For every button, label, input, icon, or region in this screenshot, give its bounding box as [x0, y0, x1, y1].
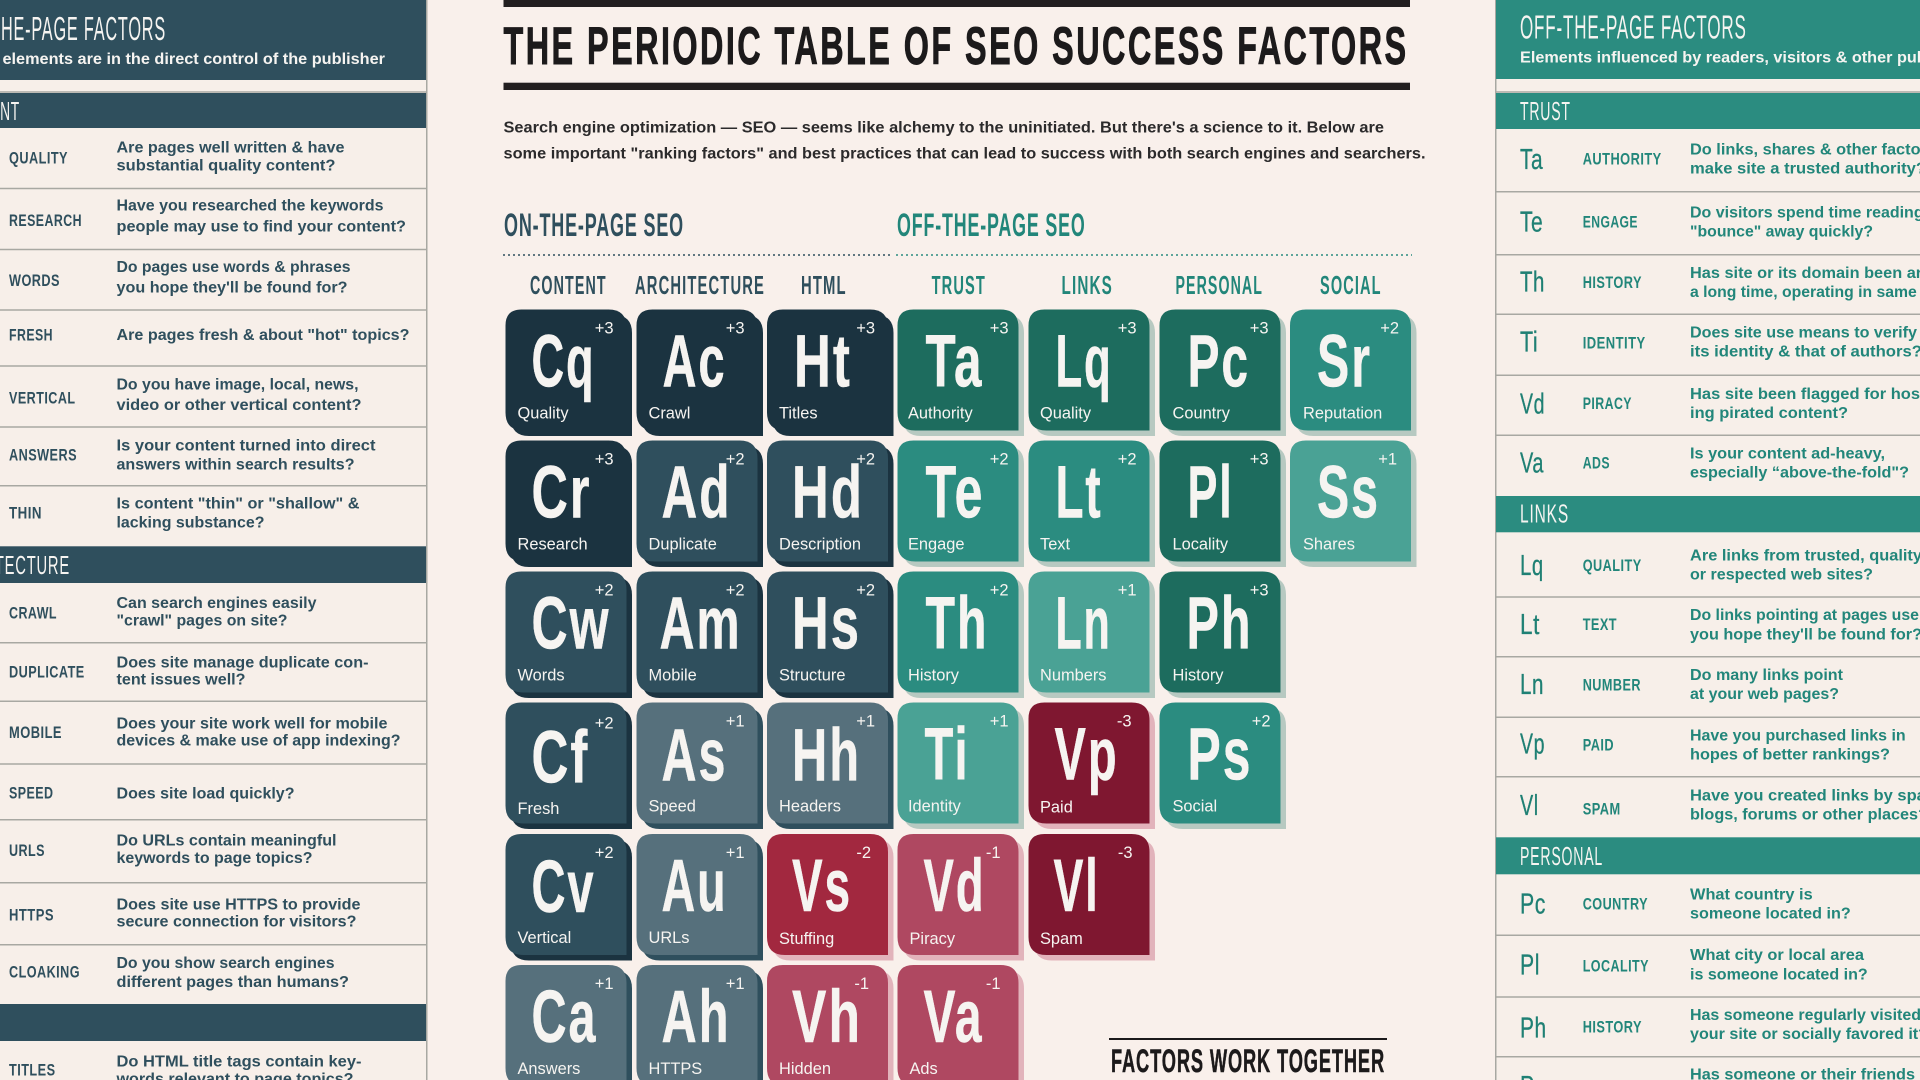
row: Va ads: Is your content ad-heavy,	[1690, 446, 1885, 463]
tile: Vs: Vs	[792, 844, 852, 927]
row: Vl spam: Vl	[1520, 790, 1539, 822]
tile: Cq	[506, 310, 632, 436]
tile: Sr: +2	[1380, 320, 1399, 338]
row: Ln number	[1520, 667, 1843, 703]
tile: Ta: Ta	[926, 320, 984, 402]
row: thin: THIN	[9, 505, 42, 523]
tile: Vh: Hidden	[779, 1060, 831, 1078]
tile: Vp	[1028, 702, 1155, 829]
row: Vd piracy: Vd	[1520, 388, 1545, 420]
tile: Ti: Identity	[908, 798, 962, 816]
row: Ti identity: IDENTITY	[1583, 334, 1646, 352]
row: answers	[9, 438, 376, 473]
row: quality: Are pages well written & have	[116, 140, 345, 157]
tile: Au: URLs	[648, 929, 690, 947]
row: Ln number: Ln	[1520, 669, 1544, 701]
tile: Ad	[636, 440, 763, 567]
row: Te engage: ENGAGE	[1583, 213, 1638, 231]
row: Ta authority	[1520, 141, 1920, 177]
tile: Cw: Words	[518, 666, 565, 684]
tile: Pl	[1160, 440, 1286, 567]
row: Pc country: Pc	[1520, 888, 1546, 920]
tile: Vd: Piracy	[910, 930, 956, 948]
panel header: off-the-page factors	[1496, 0, 1920, 79]
tile: Ht: Ht	[794, 320, 852, 402]
row: fresh	[9, 327, 410, 345]
tile: Ah: HTTPS	[648, 1060, 702, 1078]
tile: As: +1	[726, 712, 744, 730]
tile: Ac	[636, 310, 763, 436]
row: Te engage: "bounce" away quickly?	[1690, 224, 1873, 241]
tile: Cq: +3	[595, 320, 614, 338]
row: Lt text	[1520, 607, 1920, 643]
row: duplicate: tent issues well?	[116, 671, 246, 688]
row: mobile: devices & make use of app indexing?	[116, 733, 400, 750]
tile: Ca: Answers	[518, 1060, 580, 1078]
tile: Vl	[1028, 834, 1155, 960]
row: Lt text: Do links pointing at pages use	[1690, 607, 1919, 624]
row: Vd piracy: ing pirated content?	[1690, 405, 1848, 422]
column labels: HTML	[801, 270, 847, 300]
row: speed: SPEED	[9, 784, 54, 802]
tile: Te: Engage	[908, 536, 965, 554]
tile: Vs	[767, 834, 894, 960]
tile: Vl: Vl	[1054, 844, 1100, 927]
tile: Ti: +1	[990, 712, 1008, 730]
tile: Hh	[767, 702, 894, 829]
tile: Sr: Reputation	[1303, 404, 1382, 422]
row: Lt text: Lt	[1520, 609, 1540, 641]
tile: As: Speed	[648, 798, 696, 816]
row: https: secure connection for visitors?	[116, 913, 356, 930]
row: urls: Do URLs contain meaningful	[116, 833, 336, 850]
tile: Ac: Ac	[662, 320, 726, 402]
row: thin: lacking substance?	[116, 515, 264, 532]
tile: Cw: +2	[595, 582, 614, 600]
tile: Am: Mobile	[648, 666, 697, 684]
row: Ta authority: make site a trusted authority?	[1690, 160, 1920, 177]
tile: Hd	[767, 440, 894, 567]
tile: Ad: Ad	[662, 450, 732, 534]
row: urls: keywords to page topics?	[116, 850, 312, 867]
intro text: Search engine optimization — SEO — seems like alchemy to the uninitiated. But there's a science to it. Below are	[504, 120, 1384, 137]
row: answers: Is your content turned into direct	[116, 438, 376, 455]
row: Pc country: COUNTRY	[1583, 895, 1648, 913]
row: Vl spam: SPAM	[1583, 800, 1621, 818]
tile: Ln: +1	[1118, 582, 1136, 600]
row: Ph history	[1520, 1007, 1920, 1044]
tile: Ln: Numbers	[1040, 666, 1106, 684]
row: research: people may use to find your content?	[116, 218, 406, 235]
row: titles: TITLES	[9, 1061, 56, 1079]
row: Vd piracy: PIRACY	[1583, 395, 1632, 413]
tile: Cf: Cf	[532, 716, 590, 798]
tile: Pl: Locality	[1172, 536, 1229, 554]
tile: Va: Va	[924, 975, 984, 1058]
row: Vd piracy: Has site been flagged for host-	[1690, 386, 1920, 403]
row: Lt text: you hope they'll be found for?	[1690, 626, 1920, 643]
section bar: personal: PERSONAL	[1520, 841, 1603, 871]
tile: As	[636, 702, 763, 829]
tile: Vp: Paid	[1040, 798, 1073, 816]
tile: Ht: Titles	[779, 404, 818, 422]
tile: Am: +2	[726, 582, 744, 600]
row: Pc country	[1520, 886, 1851, 922]
tile: Cw: Cw	[532, 582, 610, 664]
intro text	[504, 120, 1426, 163]
row: Va ads: especially “above-the-fold"?	[1690, 465, 1909, 482]
tile: Cq: Quality	[518, 404, 569, 422]
row: Vp paid: hopes of better rankings?	[1690, 747, 1890, 764]
tile: Cv	[506, 834, 632, 960]
tile: Ph: +3	[1250, 582, 1268, 600]
row: research: RESEARCH	[9, 212, 82, 230]
tile: Au: Au	[662, 844, 728, 927]
tile: Pl: Pl	[1188, 450, 1234, 534]
row: Lt text: TEXT	[1583, 616, 1617, 634]
row: Ta authority: Do links, shares & other factors	[1690, 141, 1920, 158]
row: Ln number: at your web pages?	[1690, 686, 1839, 703]
tile: Ph	[1160, 572, 1286, 698]
tile: Ps: Social	[1172, 798, 1217, 816]
tile: Th	[898, 572, 1024, 698]
row: mobile: Does your site work well for mobile	[116, 715, 388, 732]
section bar: links	[1496, 496, 1920, 532]
row: speed	[9, 784, 294, 803]
tile: Lq: Quality	[1040, 404, 1092, 422]
row: Vl spam	[1520, 788, 1920, 824]
tile: Va	[898, 965, 1024, 1080]
row: Pl locality	[1520, 947, 1868, 983]
row: quality: substantial quality content?	[116, 158, 336, 175]
row: vertical: VERTICAL	[9, 389, 76, 407]
column labels: ARCHITECTURE	[635, 270, 765, 300]
tile: Ah: +1	[726, 975, 744, 993]
row: Ph history: Has someone regularly visited	[1690, 1007, 1920, 1024]
row: Vp paid: Have you purchased links in	[1690, 728, 1906, 745]
tile: Cv: Cv	[532, 845, 596, 928]
tile: Ss: Shares	[1303, 536, 1355, 554]
row: https	[9, 896, 361, 930]
row: titles	[9, 1053, 362, 1080]
row: Pl locality: What city or local area	[1690, 947, 1864, 964]
row: crawl: CRAWL	[9, 604, 57, 622]
row: fresh: FRESH	[9, 327, 53, 345]
tile: Cf	[506, 702, 632, 829]
periodic table grid	[506, 310, 1416, 1080]
tile: Hd: Description	[779, 536, 861, 554]
row: Ph history: your site or socially favored it?	[1690, 1026, 1920, 1043]
tile: Ps: Ps	[1188, 712, 1252, 796]
row: duplicate	[9, 654, 368, 688]
tile: Lq: +3	[1118, 320, 1136, 338]
tile: Ti: Ti	[924, 712, 970, 796]
tile: Vh: Vh	[792, 975, 862, 1058]
row: Ti identity: Ti	[1520, 326, 1538, 358]
tile: Th: Th	[926, 582, 988, 664]
tile: Cr: +3	[595, 450, 614, 468]
row: cloaking	[9, 955, 349, 991]
tile: Vd	[898, 834, 1024, 960]
tile: Cv: Vertical	[518, 929, 571, 947]
tile: Ti	[898, 702, 1024, 829]
row: Pl locality: is someone located in?	[1690, 966, 1868, 983]
tile: Lt	[1028, 440, 1155, 567]
row: fresh: Are pages fresh & about "hot" topics?	[116, 327, 410, 344]
row: Ln number: NUMBER	[1583, 676, 1641, 694]
row: Lq quality: Lq	[1520, 550, 1544, 582]
row: Vd piracy	[1520, 386, 1920, 422]
tile: Lt: Lt	[1056, 450, 1102, 534]
tile: Lq	[1028, 310, 1155, 436]
tile: Ss: +1	[1378, 450, 1397, 468]
row: Va ads	[1520, 446, 1909, 482]
tile: Hs: +2	[856, 582, 875, 600]
row: thin: Is content "thin" or "shallow" &	[116, 496, 360, 513]
tile: Te: +2	[990, 450, 1008, 468]
tile: Vl: -3	[1118, 844, 1132, 862]
row: words	[9, 259, 350, 297]
row: words: you hope they'll be found for?	[116, 280, 348, 297]
tile: Ca	[506, 965, 632, 1080]
tile: Lt: Text	[1040, 536, 1071, 554]
tile: Ca: +1	[595, 975, 614, 993]
tile: Cq: Cq	[532, 320, 596, 402]
tile: Hd: +2	[856, 450, 875, 468]
row: Ti identity: Does site use means to verify	[1690, 325, 1917, 342]
row: Lq quality: or respected web sites?	[1690, 566, 1873, 583]
tile: Ad: Duplicate	[648, 536, 717, 554]
column labels: SOCIAL	[1320, 270, 1382, 300]
row: duplicate: Does site manage duplicate con-	[116, 654, 368, 671]
tile: Ac: Crawl	[648, 404, 690, 422]
row: crawl: "crawl" pages on site?	[116, 612, 288, 629]
tile: Ph: History	[1172, 666, 1224, 684]
row: speed: Does site load quickly?	[116, 786, 294, 803]
row: Lq quality	[1520, 547, 1920, 583]
intro text: some important "ranking factors" and best practices that can lead to success with both search engines and searchers.	[504, 146, 1426, 163]
tile: Pc	[1160, 310, 1286, 436]
row: Te engage	[1520, 204, 1920, 241]
tile: Vp: -3	[1117, 712, 1132, 730]
row: Ti identity: its identity & that of authors?	[1690, 344, 1920, 361]
title block	[504, 0, 1410, 90]
row: Ti identity	[1520, 325, 1920, 361]
tile: Hd: Hd	[792, 450, 864, 534]
row: Vp paid: PAID	[1583, 737, 1614, 755]
row: Pl locality: Pl	[1520, 949, 1540, 981]
tile: Ta: Authority	[908, 404, 973, 422]
tile: Cr	[506, 440, 632, 567]
row: Ta authority: Ta	[1520, 144, 1543, 176]
tile: Sr	[1290, 310, 1416, 436]
row: mobile: MOBILE	[9, 724, 62, 742]
tile: Ps: +2	[1252, 712, 1270, 730]
tile: As: As	[662, 714, 728, 796]
row: cloaking: CLOAKING	[9, 964, 80, 982]
section bar: architecture	[0, 546, 426, 583]
tile: Ca: Ca	[532, 975, 598, 1058]
row: vertical: Do you have image, local, news,	[116, 376, 358, 393]
tile: Hs: Hs	[792, 582, 861, 664]
tile: Hs: Structure	[779, 666, 846, 684]
heading: on-the-page seo: ON-THE-PAGE SEO	[504, 207, 684, 243]
section bar: links: LINKS	[1520, 499, 1569, 529]
row: words: Do pages use words & phrases	[116, 259, 350, 276]
row: Th history: Th	[1520, 267, 1545, 299]
row: Ps social	[1520, 1066, 1915, 1080]
row: Ln number: Do many links point	[1690, 667, 1843, 684]
tile: Cr: Cr	[532, 450, 592, 534]
row: Vp paid: Vp	[1520, 728, 1545, 760]
tile: Ln	[1028, 572, 1155, 698]
heading: factors work together: FACTORS WORK TOGETHER	[1111, 1043, 1385, 1079]
row: Th history: HISTORY	[1583, 274, 1642, 292]
row: vertical	[9, 376, 362, 414]
tile: Vs: Stuffing	[779, 930, 834, 948]
tile: Ht: +3	[856, 320, 875, 338]
row: Va ads: ADS	[1583, 454, 1610, 472]
tile: Pc: Country	[1172, 404, 1231, 422]
row: crawl	[9, 595, 317, 629]
panel header: on-the-page factors	[0, 0, 426, 80]
tile: Va: Ads	[910, 1060, 938, 1078]
tile: Au	[636, 834, 763, 960]
row: Va ads: Va	[1520, 448, 1544, 480]
tile: Ah: Ah	[662, 975, 730, 1058]
row: Ta authority: AUTHORITY	[1583, 150, 1662, 168]
tile: Vl: Spam	[1040, 930, 1083, 948]
tile: Cf: +2	[595, 714, 614, 732]
row: mobile	[9, 715, 400, 750]
tile: Ht	[767, 310, 894, 436]
tile: Va: -1	[986, 975, 1000, 993]
tile: Pc: +3	[1250, 320, 1268, 338]
tile: Cv: +2	[595, 844, 614, 862]
tile: Am: Am	[660, 582, 742, 664]
row: Pl locality: LOCALITY	[1583, 958, 1649, 976]
tile: Au: +1	[726, 844, 744, 862]
section bar: trust	[1496, 93, 1920, 129]
tile: Th: +2	[990, 582, 1008, 600]
row: Lq quality: QUALITY	[1583, 557, 1642, 575]
row: titles: Do HTML title tags contain key-	[116, 1053, 362, 1070]
row: thin	[9, 496, 360, 532]
tile: Vh: -1	[854, 975, 869, 993]
row: https: HTTPS	[9, 906, 54, 924]
tile: Ph: Ph	[1186, 582, 1252, 664]
tile: Ss	[1290, 440, 1416, 567]
row: vertical: video or other vertical content?	[116, 397, 362, 414]
row: Lq quality: Are links from trusted, quality	[1690, 547, 1920, 564]
tile: Cw	[506, 572, 632, 698]
tile: Th: History	[908, 666, 960, 684]
tile: Ad: +2	[726, 450, 744, 468]
tile: Cr: Research	[518, 536, 588, 554]
row: Pc country: someone located in?	[1690, 905, 1851, 922]
row: https: Does site use HTTPS to provide	[116, 896, 361, 913]
tile: Ta: +3	[990, 320, 1008, 338]
row: Vp paid	[1520, 728, 1906, 764]
tile: Hs	[767, 572, 894, 698]
heading: off-the-page seo: OFF-THE-PAGE SEO	[897, 207, 1086, 243]
tile: Ps	[1160, 702, 1286, 829]
tile: Lq: Lq	[1056, 320, 1112, 402]
section bar: personal	[1496, 837, 1920, 874]
tile: Vd: Vd	[924, 844, 986, 927]
tile: Ac: +3	[726, 320, 744, 338]
column labels: PERSONAL	[1176, 270, 1263, 300]
tile: Ss: Ss	[1317, 450, 1380, 534]
column labels	[530, 270, 1382, 300]
tile: Ah	[636, 965, 763, 1080]
row: crawl: Can search engines easily	[116, 595, 317, 612]
row: answers: answers within search results?	[116, 456, 354, 473]
panel: on-the-page factors	[0, 0, 428, 1080]
tile: Lt: +2	[1118, 450, 1136, 468]
tile: Vd: -1	[986, 844, 1000, 862]
section bar: html	[0, 1004, 426, 1041]
tile: Vh	[767, 965, 894, 1080]
row: Pc country: What country is	[1690, 886, 1813, 903]
column labels: CONTENT	[530, 270, 607, 300]
column labels: LINKS	[1062, 270, 1113, 300]
row: quality	[9, 140, 345, 175]
row: Vl spam: blogs, forums or other places?	[1690, 807, 1920, 824]
tile: Hh: +1	[856, 712, 875, 730]
row: cloaking: Do you show search engines	[116, 955, 334, 972]
tile: Am	[636, 572, 763, 698]
tile: Hh: Headers	[779, 798, 841, 816]
tile: Pl: +3	[1250, 450, 1268, 468]
row: cloaking: different pages than humans?	[116, 974, 349, 991]
column labels: TRUST	[932, 270, 986, 300]
tile: Pc: Pc	[1188, 320, 1250, 402]
row: research: Have you researched the keywords	[116, 198, 384, 215]
row: urls: URLS	[9, 842, 45, 860]
row: words: WORDS	[9, 272, 60, 290]
row: Ph history: Ph	[1520, 1012, 1547, 1044]
tile: Te	[898, 440, 1024, 567]
tile: Vp: Vp	[1054, 712, 1118, 796]
tile: Te: Te	[926, 450, 984, 534]
row: urls	[9, 833, 336, 867]
row: answers: ANSWERS	[9, 446, 77, 464]
section bar: trust: TRUST	[1520, 96, 1571, 126]
tile: Sr: Sr	[1317, 320, 1372, 402]
section bar: content	[0, 93, 426, 128]
row: Th history	[1520, 265, 1920, 301]
tile: Cf: Fresh	[518, 800, 559, 818]
tile: Ln: Ln	[1056, 582, 1112, 664]
tile: Vs: -2	[856, 844, 871, 862]
tile: Ta	[898, 310, 1024, 436]
row: Ph history: HISTORY	[1583, 1019, 1642, 1037]
row: duplicate: DUPLICATE	[9, 663, 85, 681]
row: quality: QUALITY	[9, 150, 68, 168]
panel: off-the-page factors	[1495, 0, 1920, 1080]
tile: Hh: Hh	[792, 714, 861, 796]
row: research	[9, 198, 406, 235]
row: Te engage: Te	[1520, 206, 1543, 238]
